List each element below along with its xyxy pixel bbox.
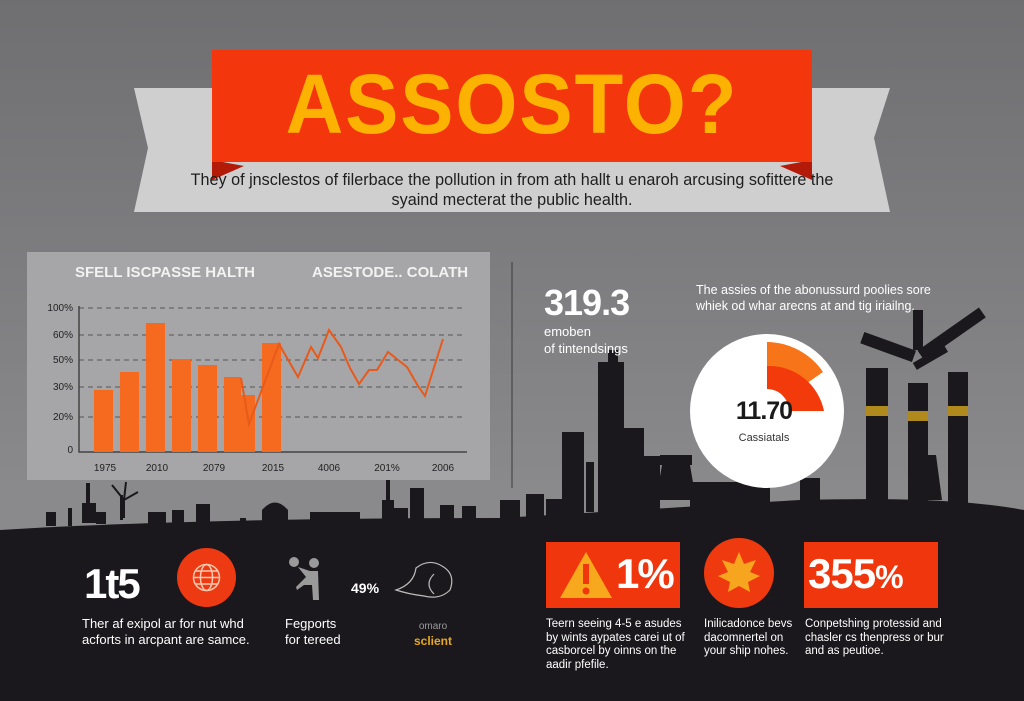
title banner <box>134 50 890 212</box>
pie chart <box>690 334 844 488</box>
icon: globe <box>177 548 236 607</box>
bar and line chart: 100% <box>47 303 73 314</box>
panel: chart: ASESTODE.. COLATH <box>312 264 468 281</box>
pie chart: 11.70 <box>736 397 792 425</box>
title text: ASSOSTO? <box>286 57 738 151</box>
bar and line chart: 201% <box>374 463 400 474</box>
stat: 319.3: 319.3 <box>544 282 629 323</box>
bar and line chart: 50% <box>53 355 73 366</box>
bar and line chart: 2079 <box>203 463 226 474</box>
icon: leaf circle <box>704 538 774 608</box>
bar and line chart: 30% <box>53 382 73 393</box>
stat: 1t5: 1t5 <box>84 560 139 607</box>
bar and line chart: 4006 <box>318 463 341 474</box>
bar and line chart: 20% <box>53 412 73 423</box>
text: callout 1 description: Teern seeing 4-5 e asudes by wints aypates carei ut of casborcel by oinns on the aadir pfefile. <box>546 618 685 670</box>
text: Fegports: for tereed <box>285 632 341 647</box>
bar and line chart: 2010 <box>146 463 169 474</box>
panel: chart <box>27 252 490 480</box>
text: sclient <box>414 621 452 648</box>
text: sclient: omaro <box>419 621 447 632</box>
text: callout 3 description: Conpetshing protessid and chasler cs thenpress or bur and as peutioe. <box>805 618 944 657</box>
icon: outline cloud <box>394 562 452 598</box>
pie chart: Cassiatals <box>739 432 790 444</box>
bar and line chart: 1975 <box>94 463 117 474</box>
text: right description: The assies of the abonussurd poolies sore whiek od whar arecns at and tig iriailng. <box>696 283 931 313</box>
stat: 319.3: emoben <box>544 324 591 339</box>
callout: 1%: 1% <box>616 550 673 597</box>
bar and line chart: 0 <box>67 445 73 456</box>
subtitle: syaind mecterat the public health. <box>392 191 632 209</box>
chart headings: SFELL ISCPASSE HALTH <box>75 264 255 281</box>
icon: person <box>289 557 319 600</box>
subtitle <box>191 171 833 209</box>
bar and line chart: 2006 <box>432 463 455 474</box>
text: leaf description: Inilicadonce bevs dacomnertel on your ship nohes. <box>704 618 792 657</box>
text: Fegports <box>285 616 341 647</box>
bar and line chart <box>47 303 467 474</box>
bar and line chart: 60% <box>53 330 73 341</box>
callout: 1% <box>546 542 680 608</box>
text: Fegports: Fegports <box>285 616 336 631</box>
stat: 49%: 49% <box>351 580 379 596</box>
text: 1t5 description: Ther af exipol ar for nut whd acforts in arcpant are samce. <box>82 616 250 647</box>
bar and line chart: 2015 <box>262 463 285 474</box>
callout: 355% <box>804 542 938 608</box>
subtitle: They of jnsclestos of filerbace the pollution in from ath hallt u enaroh arcusing sofittere the <box>191 171 833 189</box>
stat: 319.3 <box>544 282 629 356</box>
text: sclient: sclient <box>414 634 452 648</box>
callout: 355%: 355% <box>808 550 903 597</box>
stat: 319.3: of tintendsings <box>544 341 628 356</box>
